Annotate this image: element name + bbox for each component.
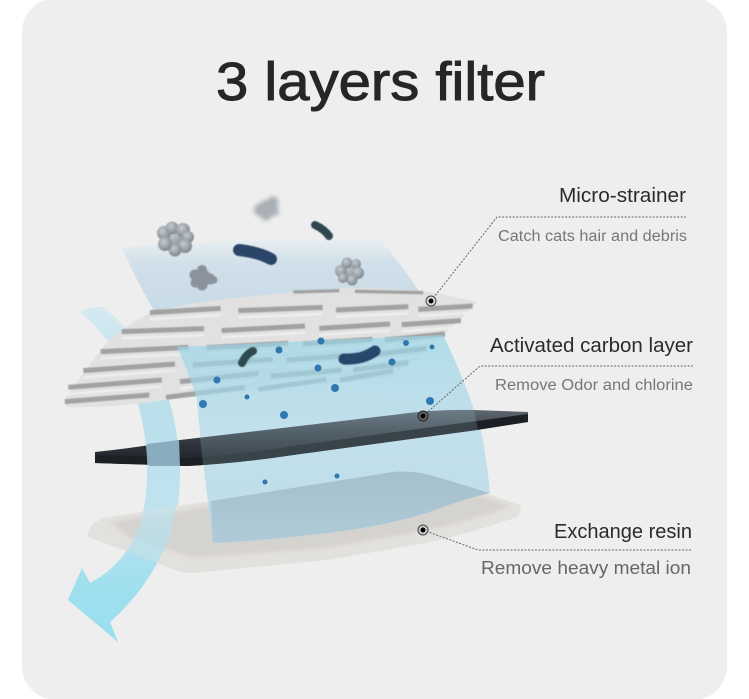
water beam below strainer <box>177 335 490 543</box>
arrow tint over carbon <box>147 440 180 466</box>
exchange resin layer <box>88 472 521 573</box>
dust cluster 3 <box>190 265 218 290</box>
leader line: activated carbon <box>423 366 693 416</box>
dust cluster 4 <box>335 258 364 286</box>
micro-strainer layer <box>63 288 477 407</box>
bacterium 2 <box>315 225 329 236</box>
flow arrow <box>68 307 180 642</box>
bacterium 4 <box>344 351 375 359</box>
leader line: micro-strainer <box>431 217 686 301</box>
dust cluster 1 <box>157 222 194 256</box>
dust cluster 2 <box>254 196 279 220</box>
water beam above strainer <box>122 239 443 347</box>
bacterium 3 <box>242 351 253 363</box>
filtered particles <box>199 338 434 484</box>
marker: micro-strainer <box>426 296 436 306</box>
marker: activated carbon <box>418 411 428 421</box>
bacterium 1 <box>239 250 271 259</box>
beam tint over carbon <box>200 410 478 465</box>
dust particles <box>157 196 364 290</box>
label: activated carbon heading: Activated carbon layer <box>490 335 693 357</box>
leader line: exchange resin <box>423 530 692 550</box>
label: activated carbon description: Remove Odor and chlorine <box>495 377 693 394</box>
label: exchange resin description: Remove heavy metal ion <box>481 558 691 578</box>
flow arrow overlay <box>68 402 177 642</box>
beam tint over resin <box>211 472 490 543</box>
title: 3 layers filter <box>216 52 545 112</box>
label: micro-strainer heading: Micro-strainer <box>559 185 686 207</box>
activated carbon layer <box>95 410 528 466</box>
bacteria <box>239 225 375 363</box>
label: exchange resin heading: Exchange resin <box>554 521 692 543</box>
label: micro-strainer description: Catch cats hair and debris <box>498 228 687 245</box>
marker: exchange resin <box>418 525 428 535</box>
